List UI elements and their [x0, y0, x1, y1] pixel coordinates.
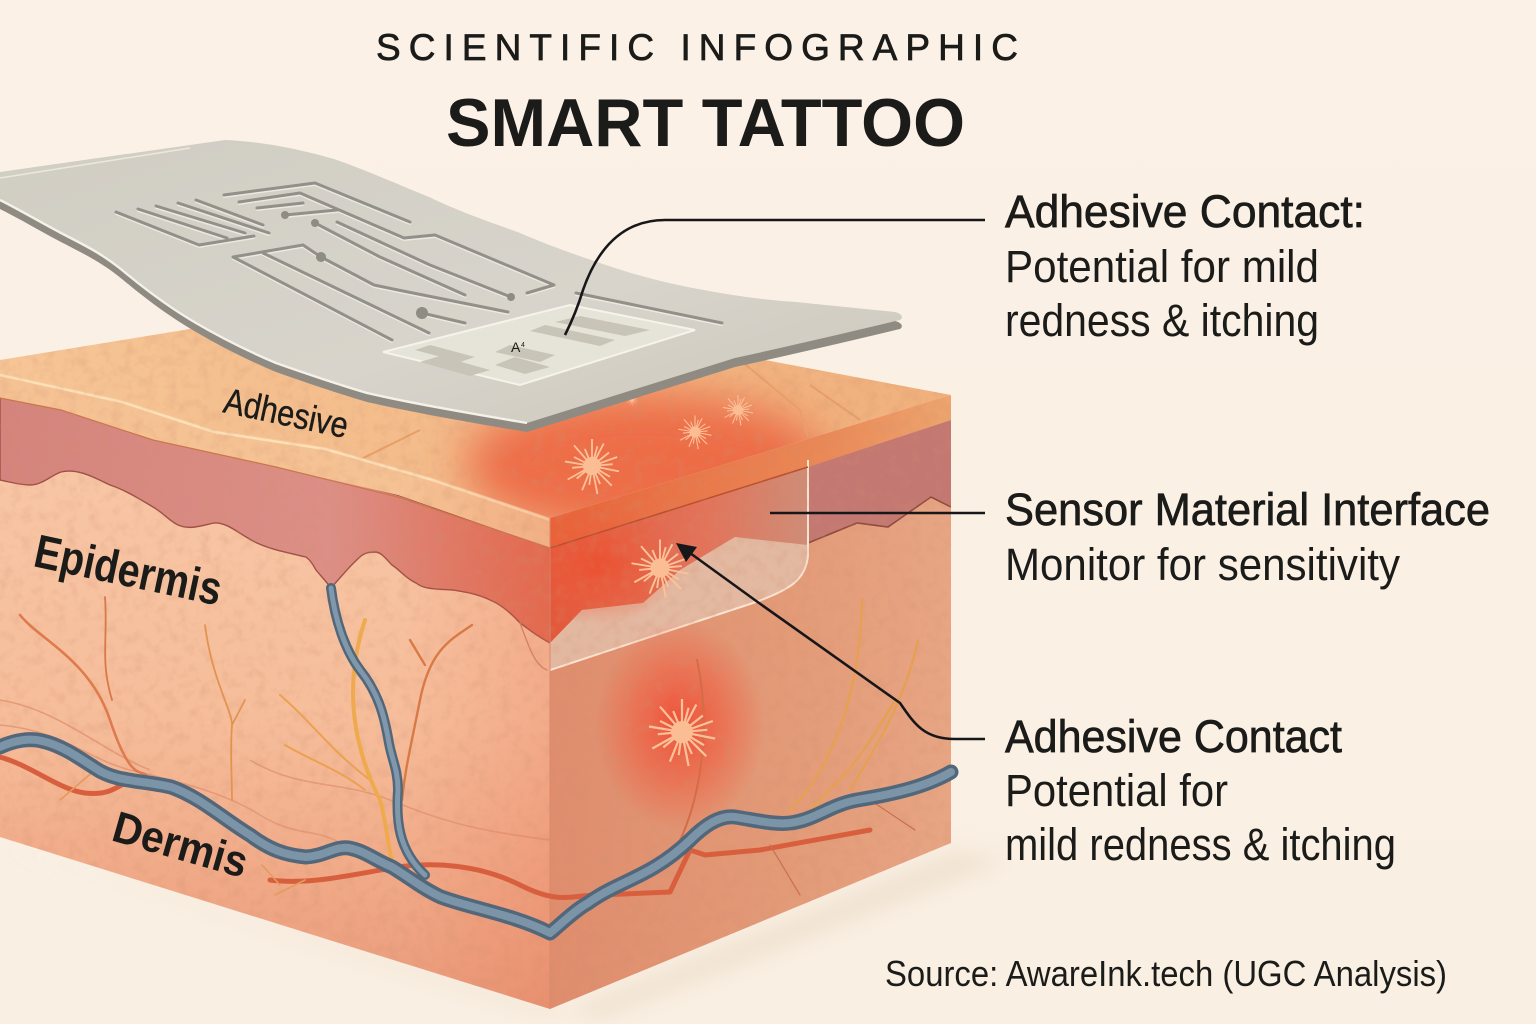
sensor window: [383, 305, 695, 385]
circuit nodes: [281, 211, 515, 319]
leader arrow 3: [676, 543, 985, 739]
layer label: Adhesive: Adhesive: [220, 380, 352, 446]
callout 1: Adhesive Contact: Potential for mild: [1005, 241, 1319, 292]
block shadow: [0, 845, 1010, 1020]
layer label: Dermis: Dermis: [107, 803, 253, 888]
blue vein branch: [331, 588, 425, 875]
right face of block: [550, 395, 951, 1009]
callout 1: Adhesive Contact: Adhesive Contact:: [1005, 186, 1365, 237]
blue vein main: [0, 740, 951, 933]
irritation bursts: [565, 394, 753, 766]
title: overline: SCIENTIFIC INFOGRAPHIC: [376, 27, 1024, 68]
smart tattoo patch: [0, 140, 902, 432]
sensor bars: [415, 316, 650, 376]
dermis ridge lines: [0, 700, 550, 850]
callout 2: Sensor Material Interface: Monitor for sensitivity: [1005, 539, 1400, 590]
callout 1: Adhesive Contact: redness & itching: [1005, 295, 1319, 346]
callout 3: Adhesive Contact: Adhesive Contact: [1005, 711, 1342, 762]
epidermis pink layer: [0, 395, 550, 643]
inflamed pink layer: [550, 467, 808, 643]
tan upper layer: [0, 373, 550, 548]
source note: Source: AwareInk.tech (UGC Analysis): [885, 953, 1447, 994]
glows: [606, 625, 756, 818]
callout 2: Sensor Material Interface: [1005, 484, 1490, 590]
callout 2: Sensor Material Interface: Sensor Material Interface: [1005, 484, 1490, 535]
callout 3: Adhesive Contact: mild redness & itching: [1005, 819, 1396, 870]
left face of block: [0, 360, 560, 1020]
title: main heading: SMART TATTOO: [446, 85, 965, 161]
thin vessels: [20, 597, 918, 895]
callout 3: Adhesive Contact: Potential for: [1005, 765, 1228, 816]
red arteries: [0, 757, 870, 898]
callout 1: Adhesive Contact: [1005, 186, 1365, 346]
right pink layer: [808, 420, 951, 543]
surface highlight: [0, 375, 550, 520]
right tan layer: [550, 395, 951, 548]
patch thickness edge: [0, 149, 902, 432]
patch surface: [0, 140, 902, 423]
callout 3: Adhesive Contact: [1005, 711, 1396, 870]
skin block illustration: [0, 320, 960, 1020]
leader line 2: [770, 512, 985, 514]
sensor mark: A: [511, 339, 521, 355]
corner edge: [549, 518, 551, 1009]
leader line 1: [565, 220, 985, 335]
top surface of skin: [0, 328, 951, 518]
sensor window: 4: [521, 342, 525, 349]
layer label: Epidermis: Epidermis: [30, 524, 227, 615]
translucent sensor patch lower: [550, 537, 808, 670]
skin texture: [0, 334, 951, 896]
patch outline: [550, 460, 808, 670]
circuit traces: [116, 183, 722, 342]
